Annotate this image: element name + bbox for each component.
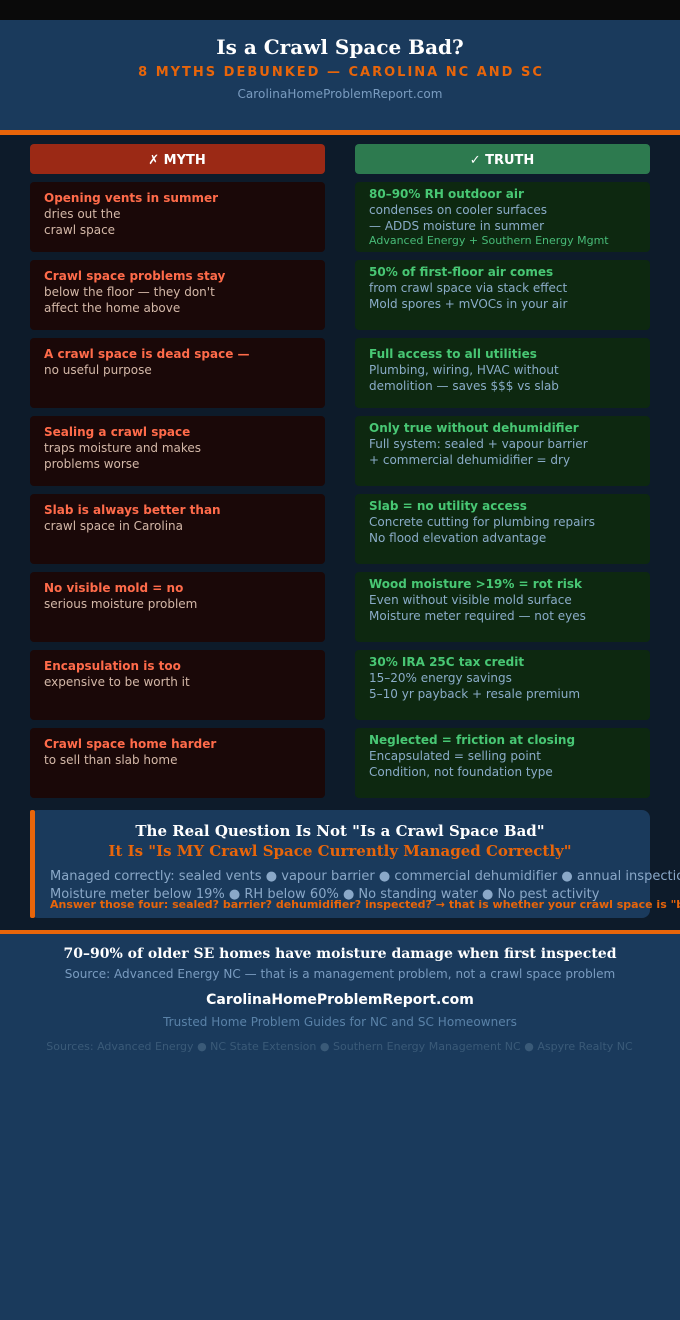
myth 8: Crawl space home harder [44, 737, 216, 751]
truth 1 [355, 182, 650, 252]
callout: the real question: It Is "Is MY Crawl Space Currently Managed Correctly" [108, 842, 572, 860]
myth 8: to sell than slab home [44, 753, 177, 767]
title: Is a Crawl Space Bad? [216, 35, 464, 59]
truth 1: — ADDS moisture in summer [369, 219, 544, 233]
truth 1: Advanced Energy + Southern Energy Mgmt [369, 234, 609, 247]
myth 5 [30, 494, 325, 564]
footer statistic: 70–90% of older SE homes have moisture damage when first inspected [64, 946, 617, 962]
myth 3: A crawl space is dead space — [44, 347, 250, 361]
truth 5: No flood elevation advantage [369, 531, 546, 545]
truth 3 [355, 338, 650, 408]
truth 5: Concrete cutting for plumbing repairs [369, 515, 595, 529]
truth 6: Wood moisture >19% = rot risk [369, 577, 583, 591]
truth 2 [355, 260, 650, 330]
truth 7 [355, 650, 650, 720]
truth 4: Only true without dehumidifier [369, 421, 579, 435]
site url: CarolinaHomeProblemReport.com [237, 87, 443, 101]
myth 2: Crawl space problems stay [44, 269, 225, 283]
callout: the real question [30, 810, 680, 918]
callout: the real question: Moisture meter below 19% ● RH below 60% ● No standing water ● No pest activity [50, 887, 600, 902]
truth 7: 15–20% energy savings [369, 671, 512, 685]
myth 4 [30, 416, 325, 486]
myth 1: Opening vents in summer [44, 191, 218, 205]
truth 6: Even without visible mold surface [369, 593, 572, 607]
truth 1: condenses on cooler surfaces [369, 203, 547, 217]
myth 7: expensive to be worth it [44, 675, 190, 689]
truth 3: Plumbing, wiring, HVAC without [369, 363, 559, 377]
myth 1: crawl space [44, 223, 115, 237]
footer sources: Sources: Advanced Energy ● NC State Extension ● Southern Energy Management NC ● Aspyre Realty NC [46, 1040, 633, 1053]
truth 8: Encapsulated = selling point [369, 749, 541, 763]
truth 1: 80–90% RH outdoor air [369, 187, 524, 201]
truth 2: from crawl space via stack effect [369, 281, 568, 295]
truth 8: Condition, not foundation type [369, 765, 553, 779]
statistic source: Source: Advanced Energy NC — that is a management problem, not a crawl space problem [65, 967, 615, 981]
callout: the real question: Managed correctly: sealed vents ● vapour barrier ● commercial dehumidifier ● annual inspection [50, 869, 680, 884]
truth 4: + commercial dehumidifier = dry [369, 453, 570, 467]
myth 6: No visible mold = no [44, 581, 183, 595]
myth 3: no useful purpose [44, 363, 152, 377]
header panel [0, 20, 680, 135]
myth 3 [30, 338, 325, 408]
truth 3: Full access to all utilities [369, 347, 537, 361]
myth 2: below the floor — they don't [44, 285, 215, 299]
myth 4: problems worse [44, 457, 139, 471]
truth 5: Slab = no utility access [369, 499, 527, 513]
myth 1 [30, 182, 325, 252]
myth 7: Encapsulation is too [44, 659, 181, 673]
myth 5: crawl space in Carolina [44, 519, 183, 533]
truth 6 [355, 572, 650, 642]
myth 6: serious moisture problem [44, 597, 197, 611]
myth 4: Sealing a crawl space [44, 425, 190, 439]
truth 8 [355, 728, 650, 798]
truth 4: Full system: sealed + vapour barrier [369, 437, 588, 451]
myth 4: traps moisture and makes [44, 441, 201, 455]
myth 5: Slab is always better than [44, 503, 221, 517]
callout: the real question: The Real Question Is Not "Is a Crawl Space Bad" [135, 822, 545, 840]
truth 6: Moisture meter required — not eyes [369, 609, 586, 623]
truth column header [355, 144, 650, 174]
truth 8: Neglected = friction at closing [369, 733, 575, 747]
myth 6 [30, 572, 325, 642]
subtitle: 8 MYTHS DEBUNKED — CAROLINA NC AND SC [138, 65, 544, 80]
footer tagline: Trusted Home Problem Guides for NC and SC Homeowners [162, 1015, 517, 1029]
truth 7: 5–10 yr payback + resale premium [369, 687, 580, 701]
myth 2: affect the home above [44, 301, 180, 315]
myth 1: dries out the [44, 207, 120, 221]
truth 2: Mold spores + mVOCs in your air [369, 297, 567, 311]
myth column header: ✗ MYTH [148, 153, 206, 168]
myth 7 [30, 650, 325, 720]
myth 8 [30, 728, 325, 798]
footer panel [0, 930, 680, 1320]
truth column header: ✓ TRUTH [470, 153, 534, 168]
truth 5 [355, 494, 650, 564]
myth column header [30, 144, 325, 174]
truth 7: 30% IRA 25C tax credit [369, 655, 524, 669]
truth 3: demolition — saves $$$ vs slab [369, 379, 559, 393]
truth 4 [355, 416, 650, 486]
truth 2: 50% of first-floor air comes [369, 265, 553, 279]
footer site name: CarolinaHomeProblemReport.com [206, 992, 474, 1008]
myth 2 [30, 260, 325, 330]
